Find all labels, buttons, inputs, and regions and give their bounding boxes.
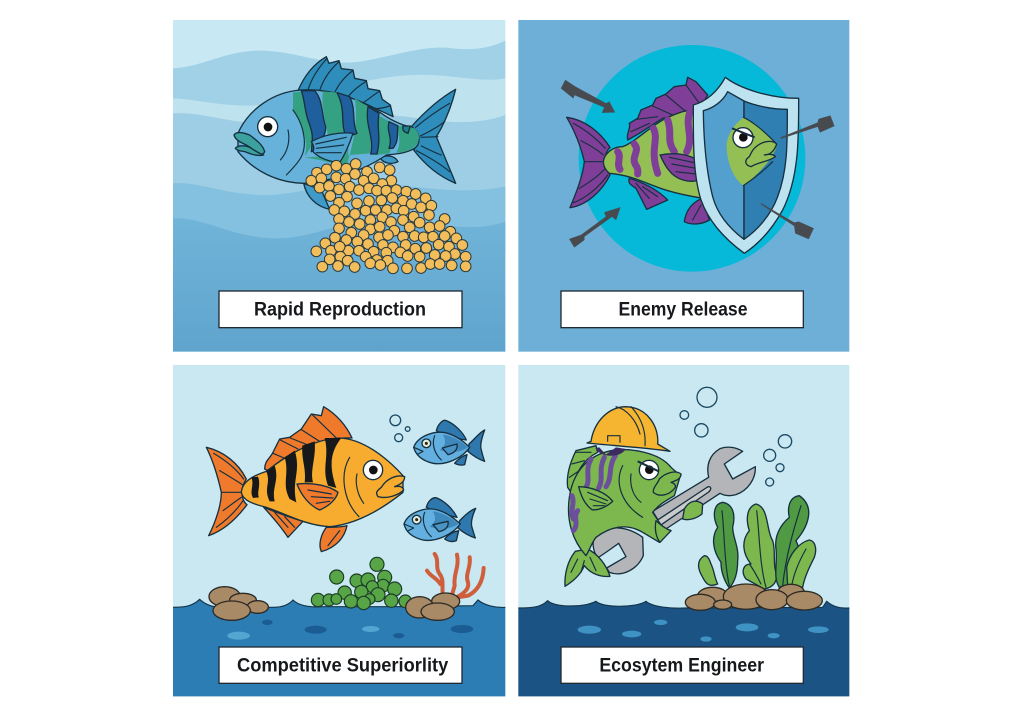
label: competitive superiority <box>219 647 462 683</box>
tail fin <box>206 447 247 536</box>
black stripes <box>251 438 341 502</box>
green pellet pile <box>311 557 412 610</box>
body <box>568 450 680 556</box>
wrench <box>593 447 755 574</box>
panel: enemy release <box>518 20 849 352</box>
right rocks <box>406 593 460 620</box>
pectoral fin <box>660 154 699 181</box>
water ripples <box>227 620 473 640</box>
panel background <box>518 365 849 696</box>
eye <box>363 460 383 480</box>
arrow: lower left <box>569 207 620 247</box>
blue fish: lower <box>404 498 476 541</box>
dark blue stripes <box>301 91 326 152</box>
left rocks <box>209 587 268 620</box>
panel background: layered water waves <box>173 20 505 352</box>
fish head in shield <box>727 117 776 186</box>
lower fins <box>629 178 668 209</box>
pectoral fin <box>297 484 338 510</box>
arrow: upper right <box>781 116 834 139</box>
label: rapid reproduction: Rapid Reproduction <box>254 299 426 320</box>
lips <box>234 132 265 154</box>
tail fin <box>567 117 610 208</box>
egg pile <box>306 159 471 274</box>
fin on wrench <box>655 521 671 542</box>
gill lines <box>619 466 643 517</box>
dorsal fin <box>298 57 393 117</box>
shield <box>693 77 799 253</box>
rocks <box>685 584 822 610</box>
blue fish <box>234 57 456 209</box>
bubbles <box>390 415 410 442</box>
label: competitive superiority: Competitive Superiorlity <box>237 655 449 676</box>
gill lines <box>344 457 364 517</box>
dorsal fin <box>567 446 598 492</box>
water with wave surface <box>518 601 849 696</box>
lower fins <box>264 507 303 537</box>
arrow: upper left <box>561 80 615 113</box>
label: rapid reproduction <box>219 291 462 328</box>
pectoral fin <box>579 487 613 510</box>
kelp: right small <box>787 540 816 587</box>
lips <box>746 141 777 167</box>
ventral fin <box>304 183 330 209</box>
panel background <box>173 365 505 696</box>
dorsal fin <box>627 77 708 140</box>
wrench lower head <box>593 528 643 574</box>
arrow: lower right <box>761 203 814 239</box>
kelp: small left <box>698 556 718 585</box>
lips <box>653 472 681 495</box>
kelp <box>698 496 816 589</box>
green bands <box>293 91 419 167</box>
cyan circle <box>579 45 805 272</box>
orange fish <box>206 407 405 552</box>
blue fish: upper <box>414 420 485 465</box>
purple stripes <box>572 456 615 531</box>
water with wave surface <box>173 599 505 696</box>
eye <box>733 128 753 148</box>
panel: rapid reproduction <box>173 20 505 352</box>
eye <box>258 117 278 137</box>
body <box>241 438 403 527</box>
dorsal fin <box>265 407 352 471</box>
label: ecosystem engineer: Ecosytem Engineer <box>599 655 765 676</box>
kelp: dark left <box>714 502 738 588</box>
tail fin <box>411 89 456 183</box>
pectoral fin <box>311 133 353 163</box>
panel: competitive superiority <box>173 365 505 696</box>
panel: ecosystem engineer <box>518 365 849 696</box>
shield left half <box>703 92 744 239</box>
label: ecosystem engineer <box>561 647 803 683</box>
green fish <box>565 407 703 586</box>
fin hand <box>683 501 703 520</box>
bubbles <box>680 387 792 486</box>
hat strap <box>595 447 626 456</box>
label: enemy release <box>561 291 803 328</box>
kelp: tall dark right <box>776 496 809 587</box>
red coral <box>427 554 484 597</box>
gill lines <box>280 110 304 175</box>
brow <box>638 461 659 471</box>
angry brow <box>732 128 755 137</box>
eye <box>639 460 659 480</box>
water ripples <box>578 620 829 642</box>
tail fin <box>565 549 610 586</box>
purple stripes <box>618 112 690 174</box>
arrows <box>561 80 834 247</box>
body <box>603 110 713 200</box>
label: enemy release: Enemy Release <box>618 299 747 320</box>
body <box>238 90 419 183</box>
shield right half <box>744 101 787 239</box>
wrench slot <box>656 487 711 525</box>
wrench handle and upper head <box>653 447 755 530</box>
lips <box>377 476 405 497</box>
kelp: light middle <box>743 504 776 589</box>
panel background <box>518 20 849 352</box>
hard hat <box>587 407 670 451</box>
purple and green fish <box>567 77 713 224</box>
